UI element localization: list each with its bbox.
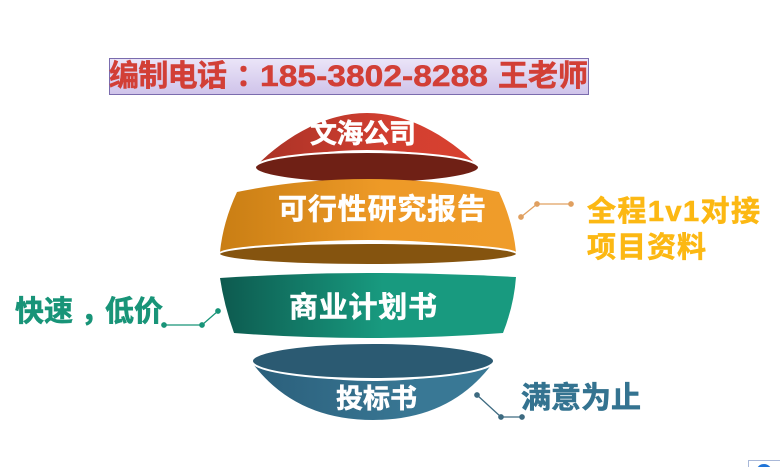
title banner: 185-3802-8288 [260, 60, 488, 93]
callout: full service: 全程1v1对接 [587, 195, 760, 228]
callout: satisfaction: 满意为止 [521, 382, 641, 415]
callout: fast and low price: 快速 [15, 295, 73, 328]
title banner: ： [236, 60, 266, 93]
callout: full service [587, 195, 760, 264]
panel: orange band [219, 179, 517, 265]
panel: red dome: 文海公司 [310, 119, 416, 149]
title banner: 王老师 [498, 60, 588, 93]
title banner: 编制电话 [109, 60, 227, 93]
connector: orange [519, 202, 573, 219]
callout: fast and low price [15, 295, 163, 328]
title banner [109, 58, 588, 94]
connector: green [162, 309, 220, 327]
panel: orange band: 可行性研究报告 [278, 193, 486, 226]
icon: corner badge [748, 460, 780, 467]
callout: full service: 项目资料 [587, 231, 706, 264]
panel: red dome [255, 113, 479, 183]
callout: fast and low price: 低价 [105, 295, 163, 328]
panel: blue bowl: 投标书 [336, 384, 417, 414]
panel: green band: 商业计划书 [289, 291, 437, 324]
connector: blue [475, 393, 524, 419]
panel: blue bowl [252, 343, 494, 420]
callout: fast and low price: ， [81, 296, 110, 328]
panel: green band [220, 273, 516, 338]
